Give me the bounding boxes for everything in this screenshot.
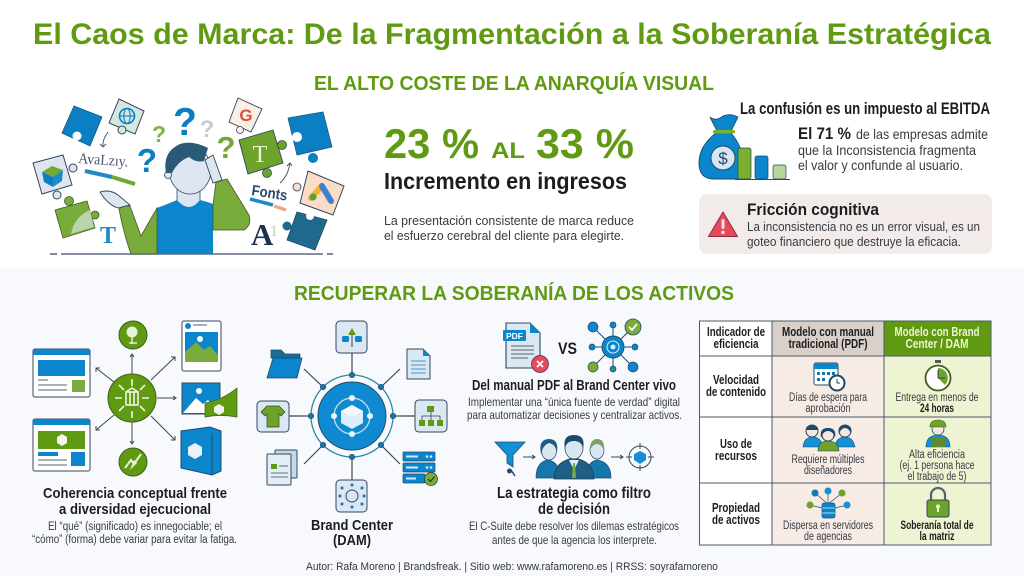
table header: Center / DAM: [906, 336, 968, 351]
table header: Indicador de: [707, 324, 765, 339]
icon: strategy funnel and executives: [495, 435, 654, 479]
diagram: coherencia conceptual: [33, 321, 237, 476]
cell text: manual model: de agencias: [804, 531, 852, 543]
cell text: brand center model: [896, 392, 978, 543]
panel: fricción cognitiva: Fricción cognitiva: [747, 200, 879, 219]
text block: 71 %: [798, 124, 988, 173]
text block: presentación consistente: [384, 213, 634, 243]
table header: eficiencia: [714, 336, 759, 351]
comparison table: [700, 321, 991, 545]
icon: padlock: [927, 488, 949, 517]
row labels: Uso de: [720, 436, 752, 451]
label: brand center: Brand Center: [311, 517, 393, 534]
text block: coherencia conceptual: “cómo” (forma) debe variar para evitar la fatiga.: [32, 534, 237, 546]
cell text: manual model: Días de espera para: [789, 392, 867, 404]
title: El Caos de Marca: De la Fragmentación a la Soberanía Estratégica: [33, 18, 991, 51]
heading: el alto coste: EL ALTO COSTE DE LA ANARQUÍA VISUAL: [314, 72, 714, 95]
diagram: brand center hub: [257, 321, 447, 512]
text block: presentación consistente: el esfuerzo cerebral del cliente para elegirte.: [384, 228, 624, 243]
text block: la estrategia: antes de que la agencia los interprete.: [492, 533, 657, 547]
cell text: brand center model: la matriz: [920, 531, 955, 543]
table header: Modelo con manual: [782, 324, 874, 339]
cell text: manual model: aprobación: [806, 403, 850, 415]
illustration: confused person with puzzle pieces: ?: [152, 121, 166, 147]
text block: del manual PDF: [467, 377, 682, 422]
stat: 23 % al 33 %: AL: [491, 138, 525, 163]
panel: fricción cognitiva: [699, 194, 992, 254]
illustration: confused person with puzzle pieces: Fonts: [250, 182, 289, 205]
text block: coherencia conceptual: Coherencia conceptual frente: [43, 485, 227, 502]
text block: la estrategia: El C-Suite debe resolver los dilemas estratégicos: [469, 519, 679, 533]
cell text: brand center model: (ej. 1 persona hace: [900, 460, 974, 472]
cell text: brand center model: Entrega en menos de: [896, 392, 978, 404]
icon: PDF vs network: PDF: [506, 331, 523, 341]
stat: 23 % al 33 %: 23 %: [384, 120, 479, 167]
text block: la estrategia: de decisión: [538, 501, 610, 518]
row labels: de activos: [712, 512, 760, 527]
illustration: confused person with puzzle pieces: 1: [270, 223, 278, 240]
illustration: confused person with puzzle pieces: ?: [200, 116, 214, 143]
row labels: recursos: [715, 448, 757, 463]
cell text: manual model: [783, 392, 873, 543]
cell text: manual model: Dispersa en servidores: [783, 520, 873, 532]
cell text: brand center model: Alta eficiencia: [909, 449, 965, 461]
row labels: [706, 372, 766, 527]
icon: money bag with bars: $: [718, 149, 728, 168]
table header: tradicional (PDF): [788, 336, 868, 351]
text block: coherencia conceptual: a diversidad ejecucional: [59, 501, 211, 518]
text block: 71 %: el valor y confunde al usuario.: [798, 157, 963, 173]
illustration: confused person with puzzle pieces: ?: [173, 101, 197, 144]
text block: del manual PDF: Del manual PDF al Brand Center vivo: [472, 377, 676, 394]
icon: worker: [926, 420, 950, 447]
panel: fricción cognitiva: goteo financiero que destruye la eficacia.: [747, 234, 961, 249]
text block: 71 %: de las empresas admite: [856, 126, 988, 142]
stat label: Incremento en ingresos: [384, 168, 627, 194]
icon: PDF vs network: VS: [558, 339, 577, 358]
panel: fricción cognitiva: La inconsistencia no es un error visual, es un: [747, 219, 980, 234]
stat: 23 % al 33 %: 33 %: [536, 120, 634, 167]
illustration: confused person with puzzle pieces: T: [253, 142, 268, 168]
icon: stopwatch: [926, 360, 950, 390]
icon: dispersed database: [806, 488, 850, 518]
illustration: confused person with puzzle pieces: ?: [217, 130, 235, 165]
table header: Modelo con Brand: [894, 324, 980, 339]
text block: la estrategia: La estrategia como filtro: [497, 485, 651, 502]
heading: recuperar la soberanía: RECUPERAR LA SOBERANÍA DE LOS ACTIVOS: [294, 282, 734, 305]
label: brand center: [311, 517, 393, 549]
row labels: Propiedad: [712, 500, 760, 515]
icon: money bag with bars: [699, 115, 790, 180]
row labels: de contenido: [706, 384, 766, 399]
cell text: manual model: Requiere múltiples: [792, 454, 865, 466]
table header: [707, 324, 980, 351]
footer credits: Autor: Rafa Moreno | Brandsfreak. | Sitio web: www.rafamoreno.es | RRSS: soyrafamoreno: [306, 561, 718, 573]
icon: warning triangle: [708, 212, 738, 236]
icon: calendar: [814, 363, 844, 390]
text block: la estrategia: [469, 485, 679, 547]
label: brand center: (DAM): [333, 532, 371, 549]
illustration: confused person with puzzle pieces: A: [251, 217, 274, 252]
illustration: confused person with puzzle pieces: AvaLzıy.: [78, 151, 129, 170]
text block: del manual PDF: para automatizar decisiones y centralizar activos.: [467, 408, 682, 422]
cell text: brand center model: Soberanía total de: [900, 520, 974, 532]
cell text: brand center model: el trabajo de 5): [908, 471, 967, 483]
icon: designers: [803, 425, 855, 451]
text block: del manual PDF: Implementar una “única fuente de verdad” digital: [468, 395, 680, 409]
row labels: Velocidad: [713, 372, 759, 387]
text block: coherencia conceptual: [32, 485, 237, 546]
illustration: confused person with puzzle pieces: ?: [137, 142, 157, 179]
cell text: manual model: diseñadores: [804, 465, 852, 477]
illustration: confused person with puzzle pieces: [33, 98, 344, 254]
text block: presentación consistente: La presentación consistente de marca reduce: [384, 213, 634, 228]
illustration: confused person with puzzle pieces: G: [239, 106, 253, 125]
text block: 71 %: El 71 %: [798, 124, 851, 143]
icon: PDF vs network: [503, 319, 641, 372]
text block: 71 %: que la Inconsistencia fragmenta: [798, 142, 976, 158]
cell text: brand center model: 24 horas: [920, 403, 954, 415]
illustration: confused person with puzzle pieces: T: [100, 223, 116, 249]
stat: 23 % al 33 %: [384, 120, 634, 167]
text block: coherencia conceptual: El “qué” (significado) es innegociable; el: [48, 521, 222, 533]
